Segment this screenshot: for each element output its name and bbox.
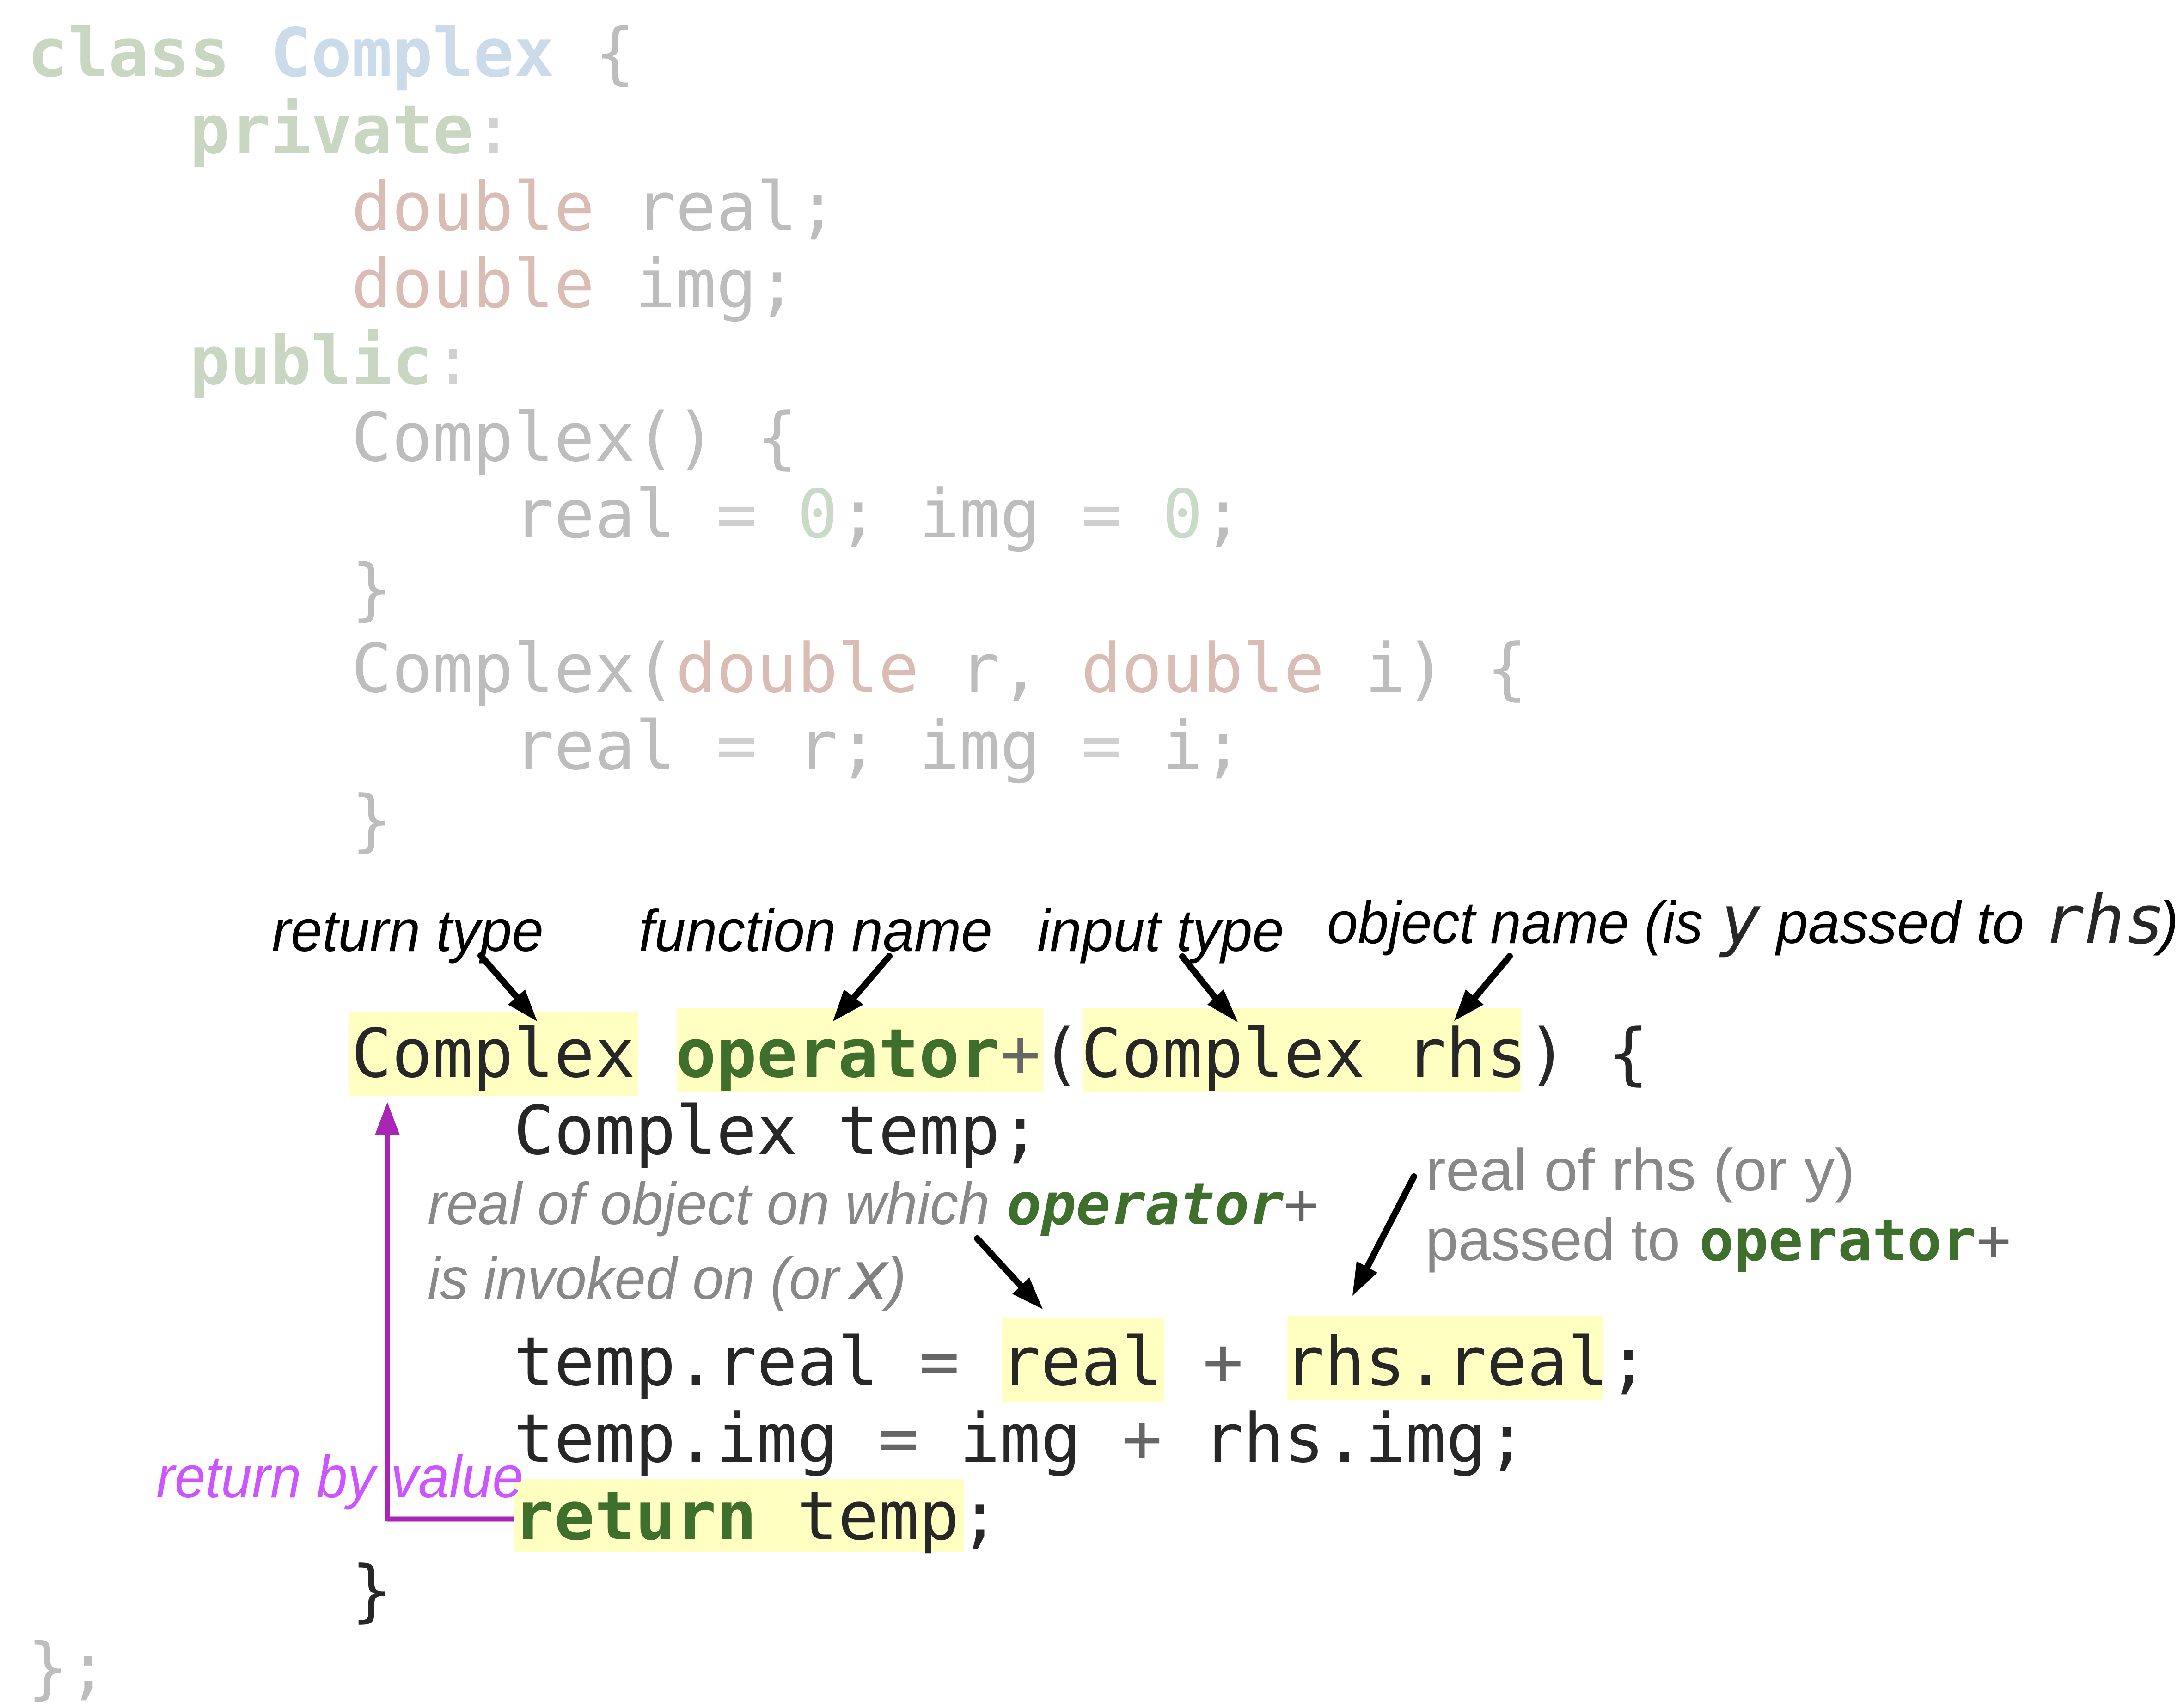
- arrow: real of rhs: [1352, 1177, 1414, 1296]
- code line: private: private:: [190, 91, 514, 169]
- label: input type: input type: [1037, 898, 1284, 964]
- code line: double real: double real;: [351, 168, 838, 246]
- label: real of object on which operator+ is invoked: x: [847, 1237, 890, 1315]
- code line: class closing: };: [27, 1629, 108, 1707]
- code line: function closing brace: }: [351, 1552, 392, 1630]
- label: object name: rhs: [2043, 881, 2165, 959]
- label: real of rhs passed to operator+: real of rhs (or y): [1425, 1137, 1855, 1203]
- label: object name: object name (is: [1327, 890, 1703, 956]
- faded class code: declarations and constructors: [27, 14, 1527, 860]
- label: return type: return type: [272, 898, 544, 964]
- highlight: input parameter: [1083, 1008, 1521, 1092]
- highlight: return temp: [514, 1479, 964, 1552]
- label: real of object on which operator+ is invoked: real of object on which: [428, 1171, 990, 1237]
- code line: function signature: Complex operator+(Complex rhs) {: [351, 1015, 1649, 1093]
- arrow: return type: [481, 956, 537, 1021]
- code line: Complex temp: Complex temp;: [514, 1092, 1040, 1170]
- label: real of object on which operator+ is invoked: operator+: [1007, 1171, 1319, 1238]
- code line: temp.real: temp.real = real + rhs.real;: [514, 1323, 1649, 1401]
- arrow: object name: [1454, 956, 1510, 1021]
- label: return by value: return by value: [156, 1444, 523, 1510]
- label: real of object on which operator+ is invoked: ): [881, 1246, 906, 1312]
- label: real of rhs passed to operator+: [1425, 1137, 2011, 1274]
- code line: double img: double img;: [351, 245, 797, 323]
- label: object name: y: [1719, 881, 1761, 959]
- label: object name: ): [2153, 890, 2179, 956]
- arrow: real of object: [977, 1238, 1043, 1309]
- label: real of rhs passed to operator+: operator+: [1699, 1207, 2011, 1274]
- code line: return temp: return temp;: [514, 1477, 1000, 1556]
- code line: parameterized constructor: Complex(double r, double i) {: [351, 630, 1527, 708]
- highlight: return type: [349, 1012, 638, 1096]
- highlight: rhs.real: [1287, 1316, 1603, 1400]
- arrow: function name: [833, 956, 889, 1021]
- highlight: real: [1002, 1318, 1164, 1402]
- code line: default constructor body: real = 0; img = 0;: [514, 476, 1243, 554]
- code line: parameterized constructor body: real = r; img = i;: [514, 707, 1243, 785]
- operator+ function code: [351, 1015, 1649, 1630]
- code line: temp.img: temp.img = img + rhs.img;: [514, 1400, 1527, 1478]
- arrow: input type: [1182, 957, 1238, 1022]
- code line: closing brace: }: [351, 550, 392, 628]
- code line: default constructor: Complex() {: [351, 399, 797, 477]
- arrow: return by value: [375, 1102, 514, 1519]
- label: object name: passed to: [1774, 890, 2024, 956]
- highlight: operator name: [677, 1008, 1043, 1092]
- code line: class Complex: class Complex {: [27, 14, 636, 92]
- label: real of object on which operator+ is invoked: [428, 1171, 1319, 1315]
- label: real of rhs passed to operator+: passed to: [1425, 1207, 1680, 1273]
- label: object name: [1327, 881, 2179, 959]
- code line: public: public:: [190, 322, 473, 400]
- label: real of object on which operator+ is invoked: is invoked on (or: [428, 1246, 841, 1312]
- code line: closing brace: }: [351, 781, 392, 860]
- label: function name: function name: [639, 898, 992, 964]
